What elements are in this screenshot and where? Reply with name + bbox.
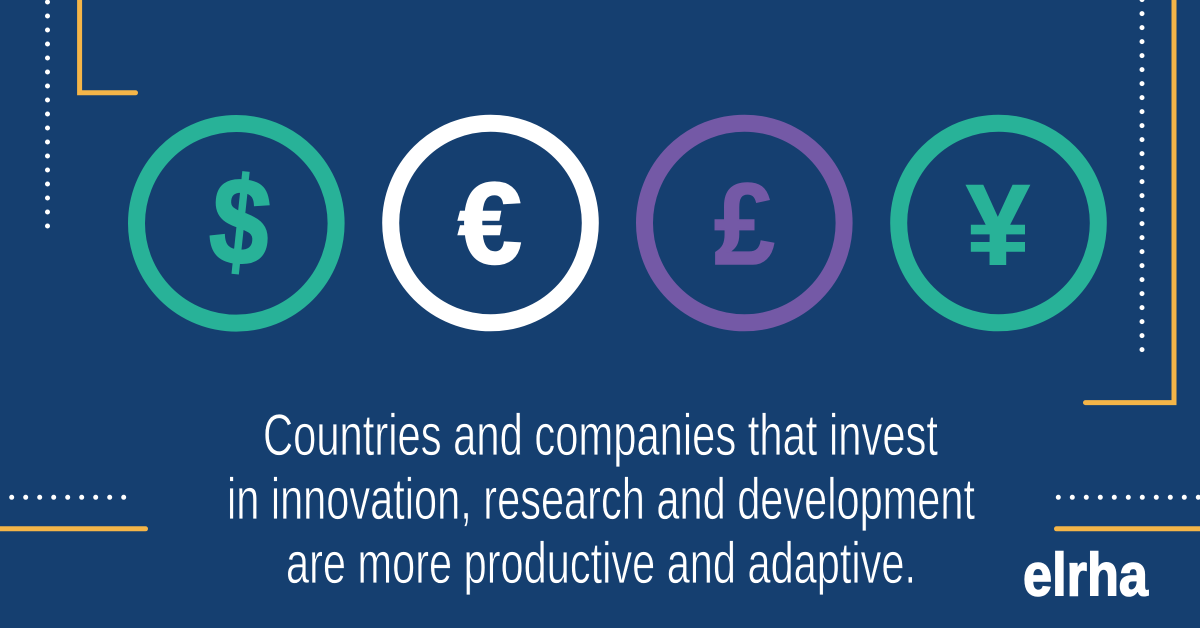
icon: pound coin — [644, 123, 844, 323]
icon: pound coin: £ — [714, 159, 775, 289]
dotted line: right vertical — [1140, 0, 1144, 350]
dotted line: bottom right — [1058, 495, 1200, 500]
icon: yen coin — [899, 123, 1098, 323]
icon: dollar coin — [136, 124, 336, 323]
gold bracket: top left — [80, 0, 136, 93]
dotted line: bottom left — [12, 495, 125, 500]
icon: euro coin — [391, 123, 590, 323]
gold bracket: top right — [1086, 0, 1174, 403]
message text — [227, 403, 975, 596]
logo: elrha: elrha — [1023, 542, 1149, 608]
dotted line: left vertical — [45, 2, 50, 227]
message text: are more productive and adaptive. — [286, 531, 916, 596]
gold line: bottom left — [0, 526, 146, 531]
icon: dollar coin: $ — [204, 149, 277, 294]
icon: yen coin: ¥ — [966, 162, 1030, 289]
gold line: bottom right — [1056, 526, 1200, 531]
message text: Countries and companies that invest — [263, 403, 938, 468]
icon: euro coin: € — [458, 158, 522, 288]
